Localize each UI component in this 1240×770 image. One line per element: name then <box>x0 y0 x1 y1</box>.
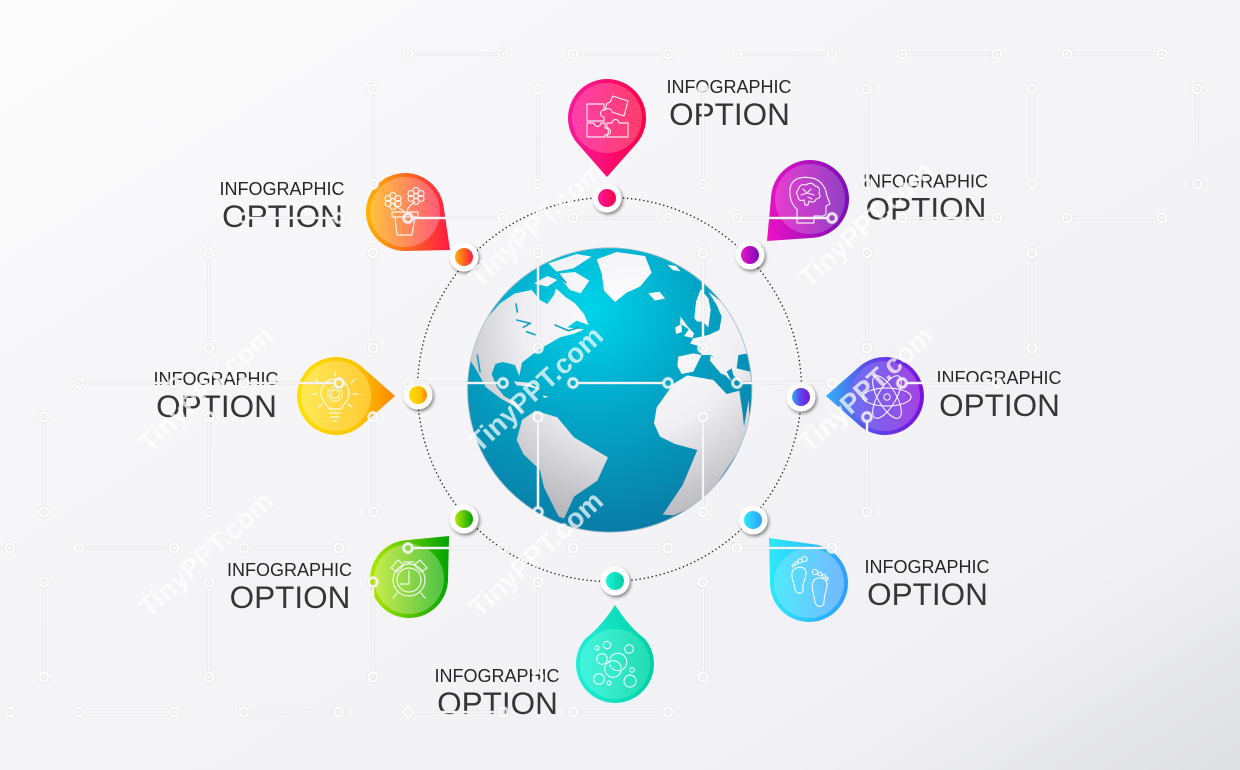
watermarks: TinyPPT.com <box>462 155 609 293</box>
node: orange <box>450 242 478 272</box>
label: bottom: INFOGRAPHIC <box>434 666 560 686</box>
label: upper left: OPTION <box>222 198 343 234</box>
label: lower right <box>864 557 990 612</box>
node: green <box>450 504 478 534</box>
icon: puzzle <box>587 96 628 137</box>
watermarks: TinyPPT.com <box>792 155 939 293</box>
pin: purple brain <box>767 160 849 241</box>
icon: bubbles <box>594 641 636 687</box>
label: upper right: OPTION <box>866 190 986 226</box>
watermarks <box>132 155 939 623</box>
watermarks: TinyPPT.com <box>462 485 609 623</box>
icon: light bulb <box>312 372 358 421</box>
label: upper left <box>219 179 345 234</box>
icon: head with brain <box>790 177 830 223</box>
globe <box>467 247 752 533</box>
node: yellow <box>404 380 432 410</box>
label: lower right: OPTION <box>867 576 988 612</box>
node: teal <box>600 566 630 596</box>
node: purple <box>736 240 764 270</box>
watermarks: TinyPPT.com <box>462 320 609 458</box>
icon: alarm clock <box>391 560 427 598</box>
pin: blue footprints <box>769 538 848 622</box>
label: lower left: INFOGRAPHIC <box>227 560 352 580</box>
node: pink <box>592 184 622 212</box>
watermarks: TinyPPT.com <box>132 320 279 458</box>
label: top <box>666 77 792 132</box>
orbit nodes <box>404 184 816 596</box>
label: bottom: OPTION <box>437 685 558 721</box>
label: lower right: INFOGRAPHIC <box>864 557 990 577</box>
pin: teal bubbles <box>576 605 654 703</box>
node: violet <box>786 382 816 412</box>
label: left: OPTION <box>156 388 277 424</box>
label: right <box>936 368 1062 423</box>
icon: flower pot <box>385 188 424 235</box>
watermarks: TinyPPT.com <box>132 485 279 623</box>
dotted orbit ring <box>418 198 802 582</box>
pin: green clock <box>370 536 449 618</box>
label: upper left: INFOGRAPHIC <box>219 179 345 199</box>
label: left: INFOGRAPHIC <box>153 369 279 389</box>
label: top: INFOGRAPHIC <box>666 77 792 97</box>
pin: pink puzzle <box>568 79 646 177</box>
pin: violet atom <box>826 357 924 435</box>
pin: yellow bulb <box>297 357 395 435</box>
label: right: INFOGRAPHIC <box>936 368 1062 388</box>
icon: atom <box>863 372 911 422</box>
icon: footprints <box>792 556 828 606</box>
label: lower left: OPTION <box>230 579 350 615</box>
node: blue <box>738 506 768 534</box>
label: top: OPTION <box>669 96 790 132</box>
label: right: OPTION <box>939 387 1060 423</box>
label: lower left <box>227 560 352 615</box>
label: upper right: INFOGRAPHIC <box>863 172 988 192</box>
label: left <box>153 369 279 424</box>
pin: orange flower pot <box>366 173 450 251</box>
watermarks: TinyPPT.com <box>792 320 939 458</box>
label: upper right <box>863 172 988 226</box>
label: bottom <box>434 666 560 721</box>
